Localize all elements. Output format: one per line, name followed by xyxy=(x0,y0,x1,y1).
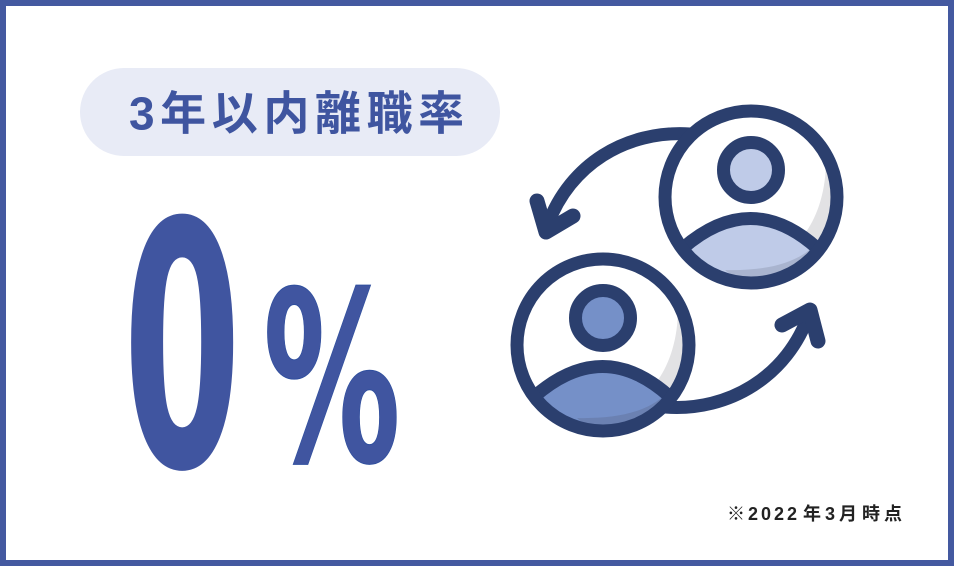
arrow: top person to bottom person xyxy=(537,134,690,232)
arrow: bottom person to top person xyxy=(665,310,818,407)
heading pill xyxy=(80,68,500,156)
footnote: ※2022年3月時点 xyxy=(727,503,902,524)
icon: bottom person xyxy=(517,259,702,448)
big number: 0: 0 xyxy=(123,152,241,547)
icon: people exchange xyxy=(517,111,850,448)
percent sign: % xyxy=(263,241,401,517)
icon: top person xyxy=(665,111,850,300)
heading text: 3年以内離職率 xyxy=(129,88,470,140)
